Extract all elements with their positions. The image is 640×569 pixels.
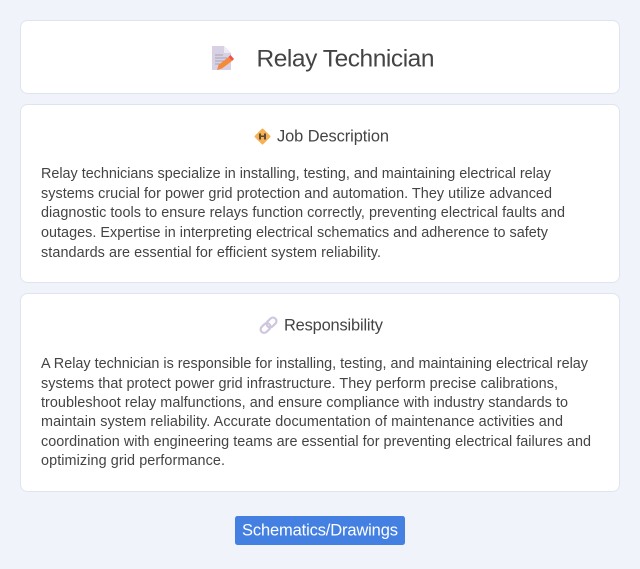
button: Schematics/Drawings [235, 516, 405, 545]
text block: job description [41, 166, 565, 261]
heading: responsibility: Responsibility [284, 316, 384, 334]
text block: job description: diagnostic tools to ensure relays function correctly, preventing electrical faults and [41, 205, 565, 221]
text block: responsibility: A Relay technician is responsible for installing, testing, and maintaining electrical relay [41, 356, 589, 372]
text block: job description: outages. Expertise in interpreting electrical schematics and adherence to safety [41, 225, 549, 241]
title: Relay Technician [256, 46, 434, 72]
text block: job description: standards are essential for efficient system reliability. [41, 245, 381, 261]
button: Schematics/Drawings: Schematics/Drawings [242, 522, 398, 540]
text block: responsibility: maintain system reliability. Accurate documentation of maintenance activities and [41, 414, 563, 430]
panel: title card [20, 20, 620, 94]
text block: responsibility [41, 356, 591, 469]
text block: responsibility: systems that protect power grid infrastructure. They perform precise calibrations, [41, 376, 558, 392]
text block: responsibility: optimizing grid performance. [41, 453, 225, 469]
text block: job description: systems crucial for power grid protection and automation. They utilize advanced [41, 186, 552, 202]
icon: chain link [259, 316, 278, 334]
text block: job description: Relay technicians specialize in installing, testing, and maintaining electrical relay [41, 166, 552, 182]
icon: document with pencil [212, 46, 234, 70]
panel: job description [20, 104, 620, 282]
panel: responsibility [20, 294, 620, 492]
heading: job description: Job Description [277, 128, 389, 146]
text block: responsibility: troubleshoot relay malfunctions, and ensure compliance with industry standards to [41, 395, 568, 411]
text block: responsibility: coordination with engineering teams are essential for preventing electrical failures and [41, 434, 591, 450]
icon: diamond road sign [256, 130, 270, 144]
